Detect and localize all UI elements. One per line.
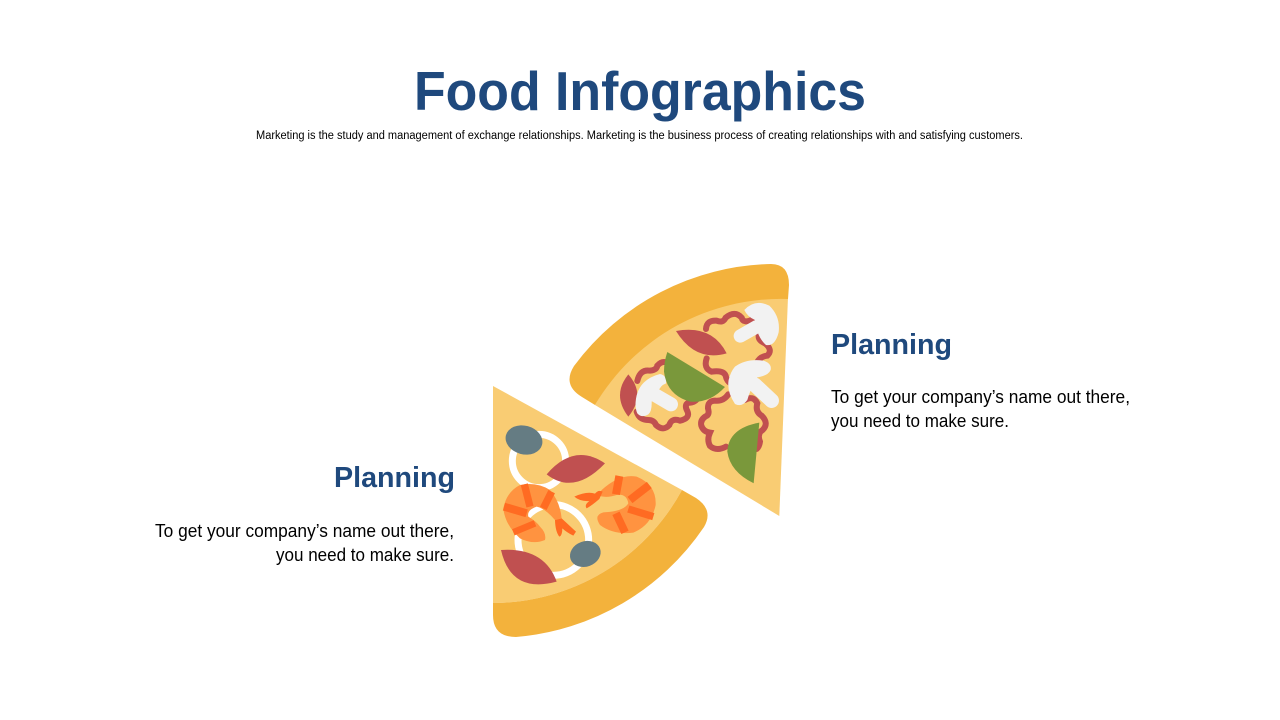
text block: left description: you need to make sure.	[276, 545, 454, 565]
mushrooms	[636, 303, 779, 416]
heading: right planning: Planning	[831, 329, 952, 361]
onion rings	[512, 434, 589, 575]
red leaves	[501, 455, 605, 584]
text block: left description	[155, 521, 454, 565]
green peppers	[664, 352, 759, 483]
text block: right description: you need to make sure.	[831, 411, 1009, 431]
text block: left description: To get your company’s name out there,	[155, 521, 454, 541]
slice cheese	[493, 386, 682, 603]
text block: right description: To get your company’s name out there,	[831, 387, 1130, 407]
text block: right description	[831, 387, 1130, 431]
pepper rings	[637, 314, 770, 449]
slice crust	[493, 490, 708, 637]
toppings	[620, 303, 779, 483]
shrimp right	[574, 476, 656, 533]
slice cheese	[595, 297, 788, 516]
pizza slice: lower left with shrimp and olives	[493, 386, 708, 637]
slice crust	[570, 264, 789, 405]
olives	[502, 421, 604, 571]
shrimp left	[503, 484, 576, 542]
toppings	[501, 421, 656, 584]
title: Food Infographics	[414, 60, 866, 122]
subtitle: Marketing is the study and management of exchange relationships. Marketing is the business process of creating relationships with and satisfying customers.	[256, 130, 1023, 142]
pizza slice: upper right with mushrooms and peppers	[570, 264, 789, 516]
heading: left planning: Planning	[334, 462, 455, 494]
red leaves	[620, 330, 727, 417]
